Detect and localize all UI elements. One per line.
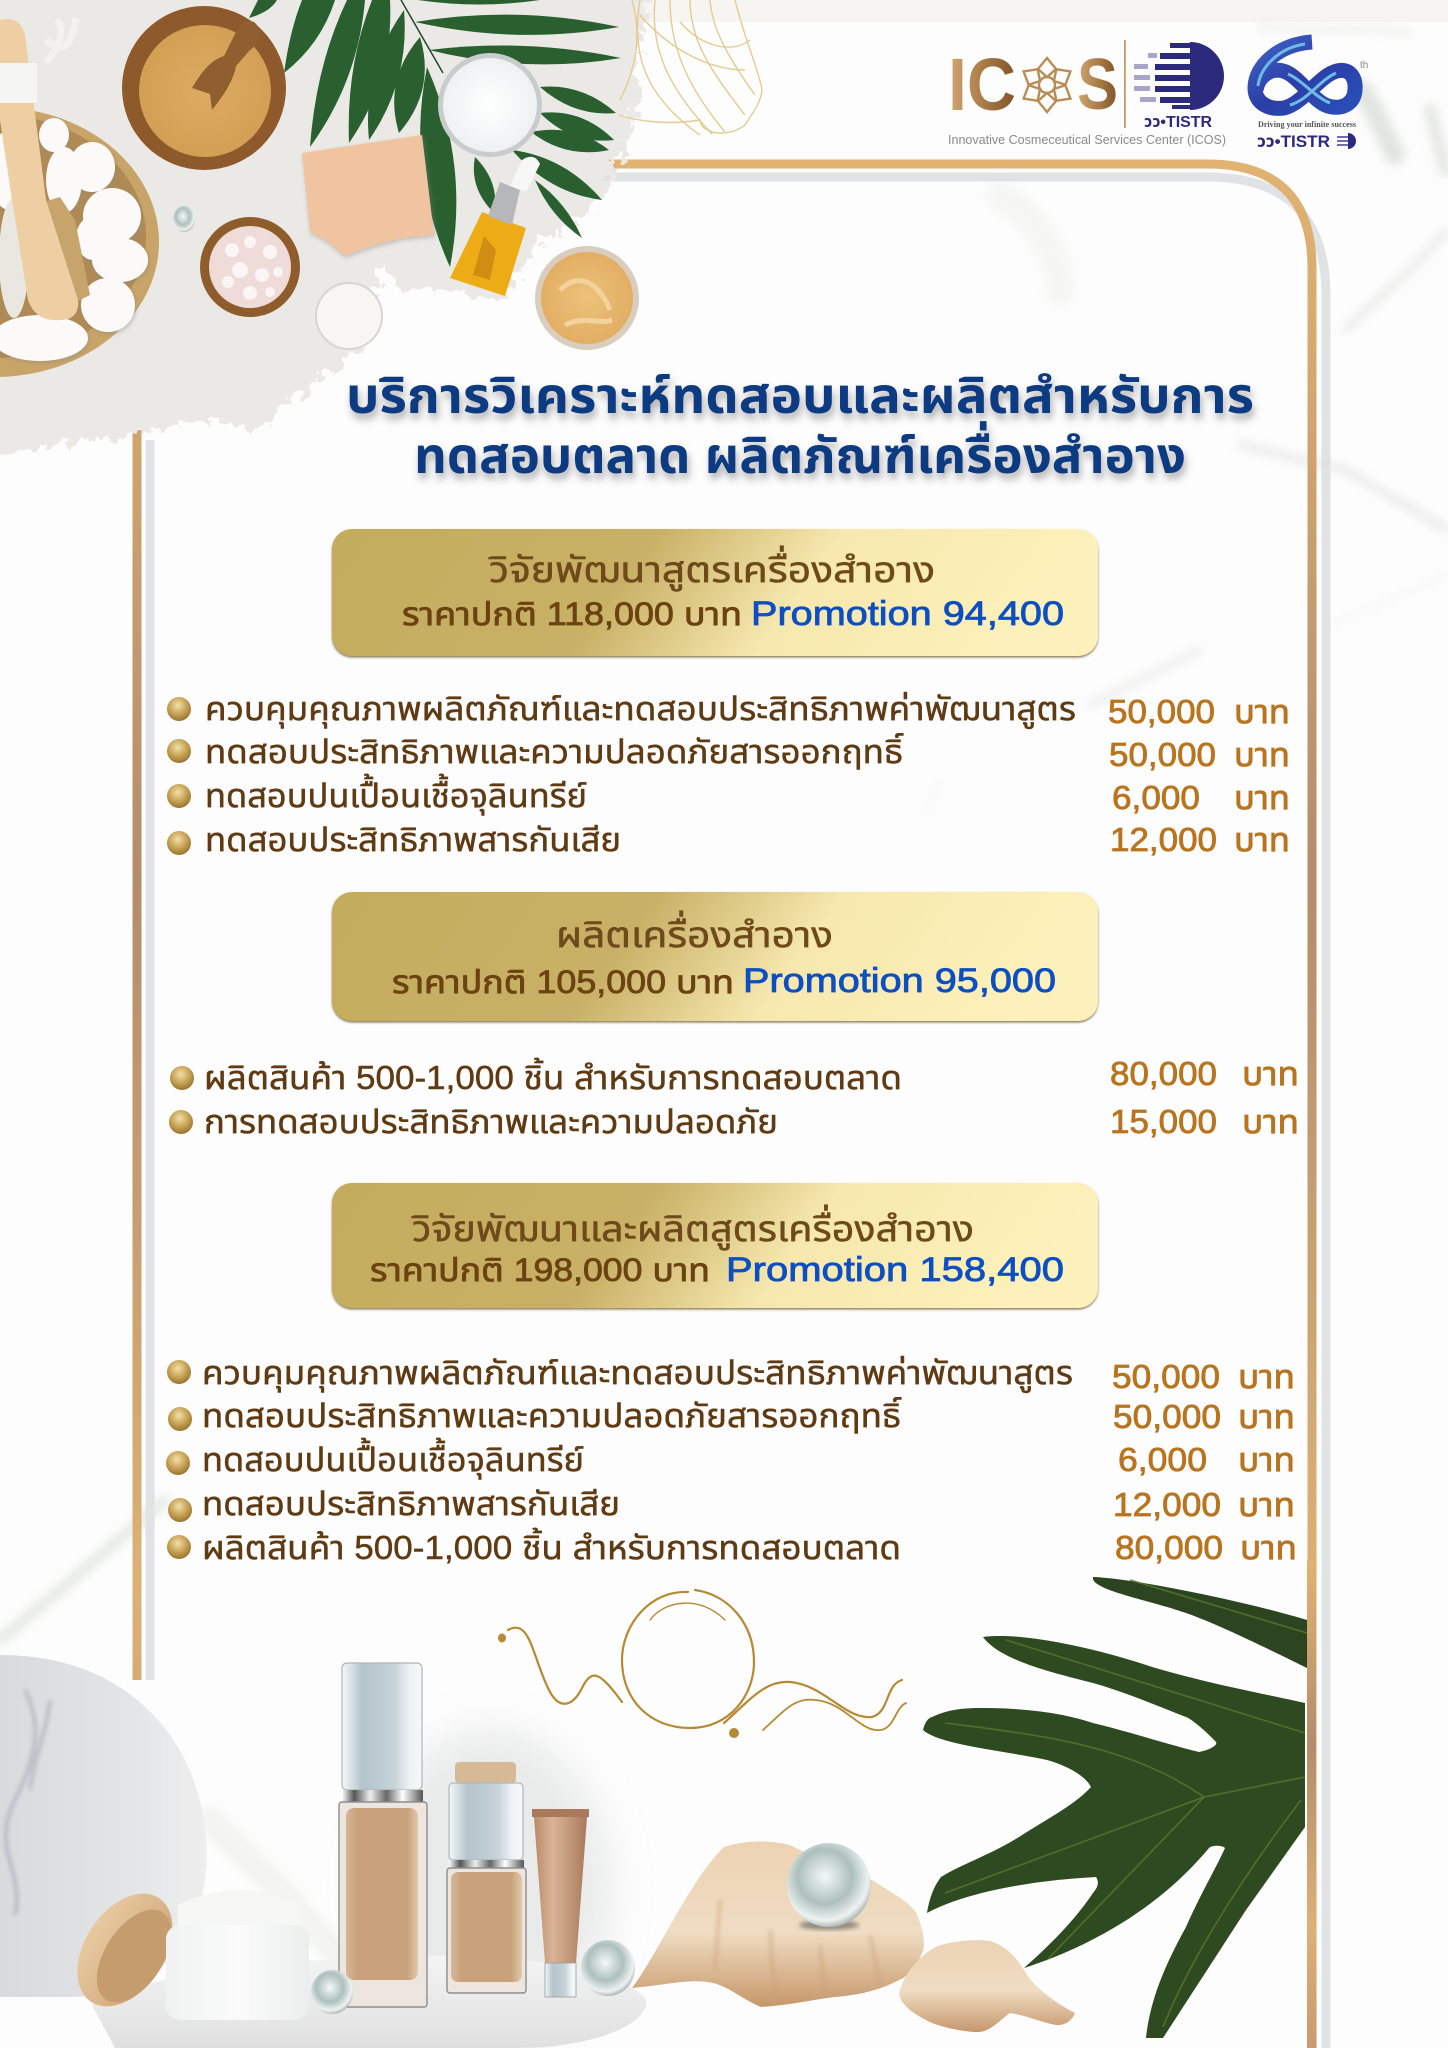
prices: บาท xyxy=(1234,693,1290,730)
TISTR name: วว•TISTR xyxy=(1257,132,1330,151)
prices: 50,000 xyxy=(1112,1358,1220,1395)
regular price: ราคาปกติ 198,000 บาท xyxy=(370,1252,710,1288)
list: combined services xyxy=(166,1354,1297,1566)
service items: การทดสอบประสิทธิภาพและความปลอดภัย xyxy=(204,1103,778,1140)
prices xyxy=(1110,1055,1299,1140)
sand textured area xyxy=(0,0,650,455)
service items: ทดสอบประสิทธิภาพและความปลอดภัยสารออกฤทธิ์ xyxy=(205,733,904,770)
main title xyxy=(346,368,1254,484)
prices: บาท xyxy=(1240,1529,1297,1566)
prices: 50,000 xyxy=(1113,1398,1221,1435)
decorative gold frame xyxy=(137,164,1312,2048)
frame segment over leaf xyxy=(1307,1560,1316,2048)
prices: บาท xyxy=(1238,1398,1295,1435)
soap bar xyxy=(302,135,434,256)
prices: บาท xyxy=(1234,779,1290,816)
wooden bowl with brown sugar and scoop xyxy=(122,6,286,170)
dropper bottle with yellow oil xyxy=(450,157,540,296)
promotion price: Promotion 158,400 xyxy=(726,1251,1064,1289)
service items: ควบคุมคุณภาพผลิตภัณฑ์และทดสอบประสิทธิภาพค่าพัฒนาสูตร xyxy=(202,1354,1073,1393)
service items: ควบคุมคุณภาพผลิตภัณฑ์และทดสอบประสิทธิภาพค่าพัฒนาสูตร xyxy=(205,690,1076,729)
jar of orange cream xyxy=(535,246,639,350)
service items xyxy=(202,1354,1073,1566)
prices: 80,000 xyxy=(1115,1529,1223,1566)
service items: ทดสอบประสิทธิภาพสารกันเสีย xyxy=(205,821,621,858)
logo wordmark ICOS: IC xyxy=(948,43,1016,126)
logo divider xyxy=(1124,40,1126,128)
service items: ทดสอบปนเปื้อนเชื้อจุลินทรีย์ xyxy=(202,1437,584,1480)
prices: 6,000 xyxy=(1118,1441,1207,1478)
palm leaves xyxy=(249,0,621,267)
bullets xyxy=(167,697,191,855)
logo wordmark ICOS xyxy=(948,43,1118,126)
promotion price: Promotion 95,000 xyxy=(743,962,1056,1000)
white cream jar xyxy=(166,1890,309,2020)
service items: ทดสอบปนเปื้อนเชื้อจุลินทรีย์ xyxy=(205,773,587,816)
banner heading: ผลิตเครื่องสำอาง xyxy=(556,910,833,955)
regular price: ราคาปกติ 118,000 บาท xyxy=(402,596,742,632)
small foundation bottle xyxy=(447,1762,526,1993)
tall foundation bottle xyxy=(339,1663,427,2007)
panel: research and development package xyxy=(332,529,1098,656)
soft shadow behind products xyxy=(370,1730,610,2048)
logo: TISTR 60th anniversary xyxy=(1255,42,1368,151)
wooden jar lid xyxy=(58,1876,192,2024)
big tropical leaf xyxy=(923,1577,1307,2038)
prices xyxy=(1108,693,1290,858)
logo caption: Innovative Cosmeceutical Services Center (ICOS) xyxy=(948,132,1226,147)
line art: gold shell xyxy=(619,0,762,135)
service items: ทดสอบประสิทธิภาพสารกันเสีย xyxy=(202,1485,620,1522)
service items: ทดสอบประสิทธิภาพและความปลอดภัยสารออกฤทธิ์ xyxy=(202,1397,902,1434)
service items: ผลิตสินค้า 500-1,000 ชิ้น สำหรับการทดสอบตลาด xyxy=(204,1057,902,1096)
basket with white stones and brush xyxy=(0,18,159,377)
prices: บาท xyxy=(1234,736,1290,773)
banner heading: วิจัยพัฒนาและผลิตสูตรเครื่องสำอาง xyxy=(411,1204,974,1250)
small pearl xyxy=(173,206,195,232)
service items xyxy=(205,690,1076,858)
list: research services xyxy=(167,690,1290,858)
prices: 6,000 xyxy=(1112,779,1200,816)
banner heading: วิจัยพัฒนาสูตรเครื่องสำอาง xyxy=(488,545,935,591)
logo: ICOS and TISTR xyxy=(948,40,1226,147)
prices: บาท xyxy=(1242,1103,1299,1140)
logo globe xyxy=(1134,42,1224,110)
prices: บาท xyxy=(1242,1055,1299,1092)
bowl of white cream xyxy=(438,53,542,157)
regular price: ราคาปกติ 105,000 บาท xyxy=(392,964,734,1000)
top marble band xyxy=(0,0,1448,22)
marble rock veins xyxy=(6,1690,50,1915)
prices: บาท xyxy=(1238,1486,1295,1523)
promotion price: Promotion 94,400 xyxy=(751,595,1064,633)
tube xyxy=(532,1809,589,1997)
banner background xyxy=(332,892,1098,1021)
tagline: Driving your infinite success xyxy=(1258,120,1356,129)
decorative frame shadow xyxy=(150,177,1326,2048)
bowl of salt xyxy=(200,217,300,317)
th mark: th xyxy=(1360,60,1368,71)
prices: 15,000 xyxy=(1110,1103,1217,1140)
infinity sixty mark xyxy=(1255,42,1355,108)
small shell xyxy=(899,1940,1075,2032)
panel: cosmetic manufacturing package xyxy=(332,892,1098,1021)
bullets xyxy=(166,1360,192,1559)
round white table xyxy=(92,1955,646,2048)
small half globe xyxy=(1337,133,1356,149)
bullets xyxy=(169,1066,194,1134)
prices: 12,000 xyxy=(1110,821,1217,858)
panel: research and manufacturing package xyxy=(332,1183,1098,1308)
list: manufacturing services xyxy=(169,1055,1299,1140)
pearls on table xyxy=(311,1940,635,2014)
service items xyxy=(204,1057,902,1140)
service items: ผลิตสินค้า 500-1,000 ชิ้น สำหรับการทดสอบตลาด xyxy=(202,1527,901,1566)
gold swirl ornament xyxy=(498,1590,906,1738)
title line 2: ทดสอบตลาด ผลิตภัณฑ์เครื่องสำอาง xyxy=(414,421,1186,484)
prices: บาท xyxy=(1238,1358,1295,1395)
prices: บาท xyxy=(1234,821,1290,858)
prices: 50,000 xyxy=(1108,693,1215,730)
prices: 50,000 xyxy=(1109,736,1216,773)
banner background xyxy=(332,529,1098,656)
prices xyxy=(1112,1358,1297,1566)
logo wordmark ICOS: S xyxy=(1077,45,1118,125)
logo TISTR name: วว•TISTR xyxy=(1144,114,1212,131)
marble rock xyxy=(0,1655,207,1997)
title line 1: บริการวิเคราะห์ทดสอบและผลิตสำหรับการ xyxy=(346,368,1254,424)
prices: 80,000 xyxy=(1110,1055,1217,1092)
banner background xyxy=(332,1183,1098,1308)
tealight candle xyxy=(316,283,382,349)
open shell with pearl xyxy=(632,1841,924,2007)
prices: 12,000 xyxy=(1113,1486,1221,1523)
prices: บาท xyxy=(1238,1441,1295,1478)
